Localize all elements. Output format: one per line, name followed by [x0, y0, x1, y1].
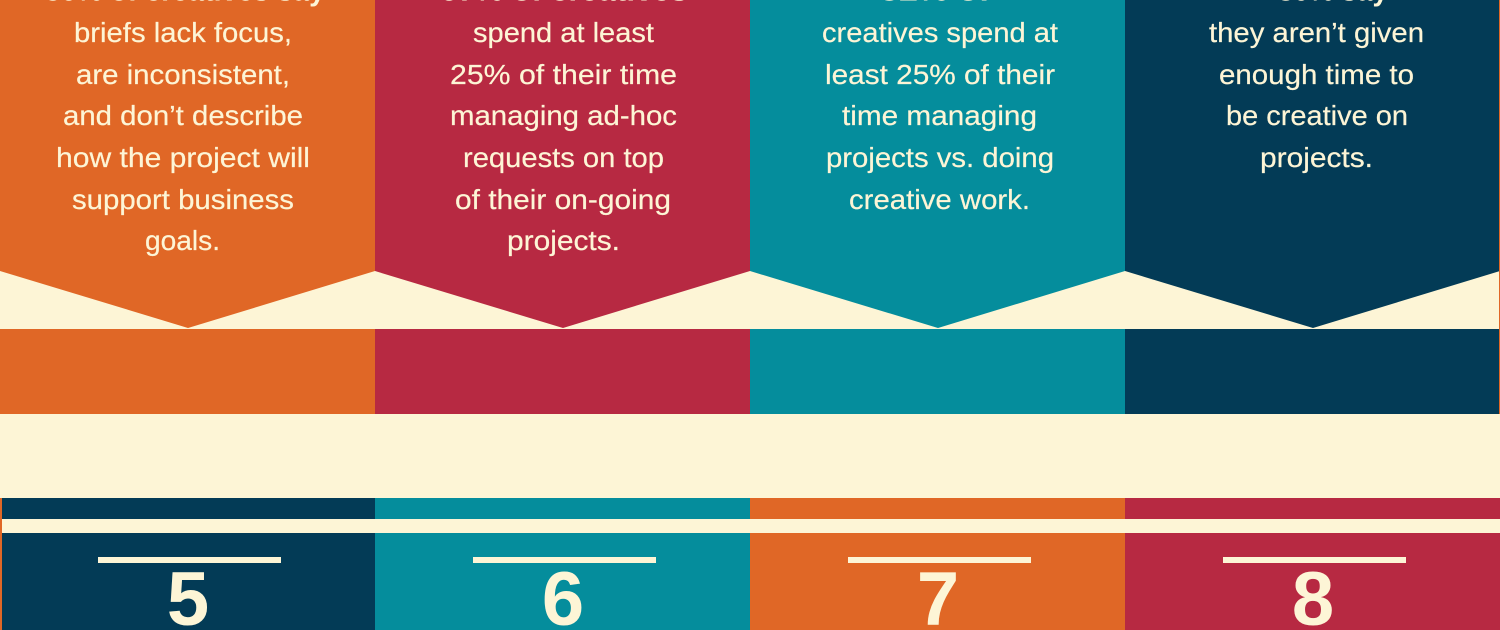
panel: teal chevron, managing projects: [750, 0, 1125, 328]
panel: orange chevron, creative briefs: [0, 0, 375, 328]
panel: teal number 6: [375, 533, 750, 630]
panel: orange chevron, creative briefs: goals.: [145, 225, 220, 256]
panel: navy chevron, not enough time: projects.: [1260, 142, 1373, 173]
panel: crimson chevron, ad-hoc requests: [375, 0, 750, 328]
colour band: thin strip above the second row: [0, 498, 1500, 519]
panel: navy chevron, not enough time: enough time to: [1219, 59, 1414, 90]
panel: navy chevron, not enough time: [1125, 0, 1500, 328]
panel: orange chevron, creative briefs: briefs lack focus,: [74, 17, 292, 48]
colour band: upper four-colour blocks: [0, 329, 1500, 414]
panel: teal chevron, managing projects: least 25% of their: [825, 59, 1055, 90]
panel: navy chevron, not enough time: be creative on: [1226, 100, 1408, 131]
panel: crimson chevron, ad-hoc requests: of their on-going: [455, 184, 671, 215]
panel: crimson number 8: [1125, 533, 1500, 630]
panel: teal chevron, managing projects: projects vs. doing: [826, 142, 1054, 173]
panel: crimson chevron, ad-hoc requests: managing ad-hoc: [450, 100, 677, 131]
panel: crimson chevron, ad-hoc requests: requests on top: [463, 142, 664, 173]
panel: crimson chevron, ad-hoc requests: 25% of their time: [450, 59, 677, 90]
panel: teal chevron, managing projects: time managing: [842, 100, 1037, 131]
panel: crimson chevron, ad-hoc requests: projects.: [507, 225, 620, 256]
panel: orange number 7: [750, 533, 1125, 630]
panel: crimson chevron, ad-hoc requests: spend at least: [473, 17, 654, 48]
panel: orange chevron, creative briefs: and don’t describe: [63, 100, 303, 131]
panel: orange chevron, creative briefs: how the project will: [56, 142, 310, 173]
panel: teal chevron, managing projects: creatives spend at: [822, 17, 1058, 48]
panel: orange chevron, creative briefs: support business: [72, 184, 294, 215]
panel: navy chevron, not enough time: they aren’t given: [1209, 17, 1424, 48]
panel: orange chevron, creative briefs: are inconsistent,: [76, 59, 290, 90]
panel: navy number 5: [0, 533, 375, 630]
panel: teal chevron, managing projects: creative work.: [849, 184, 1030, 215]
